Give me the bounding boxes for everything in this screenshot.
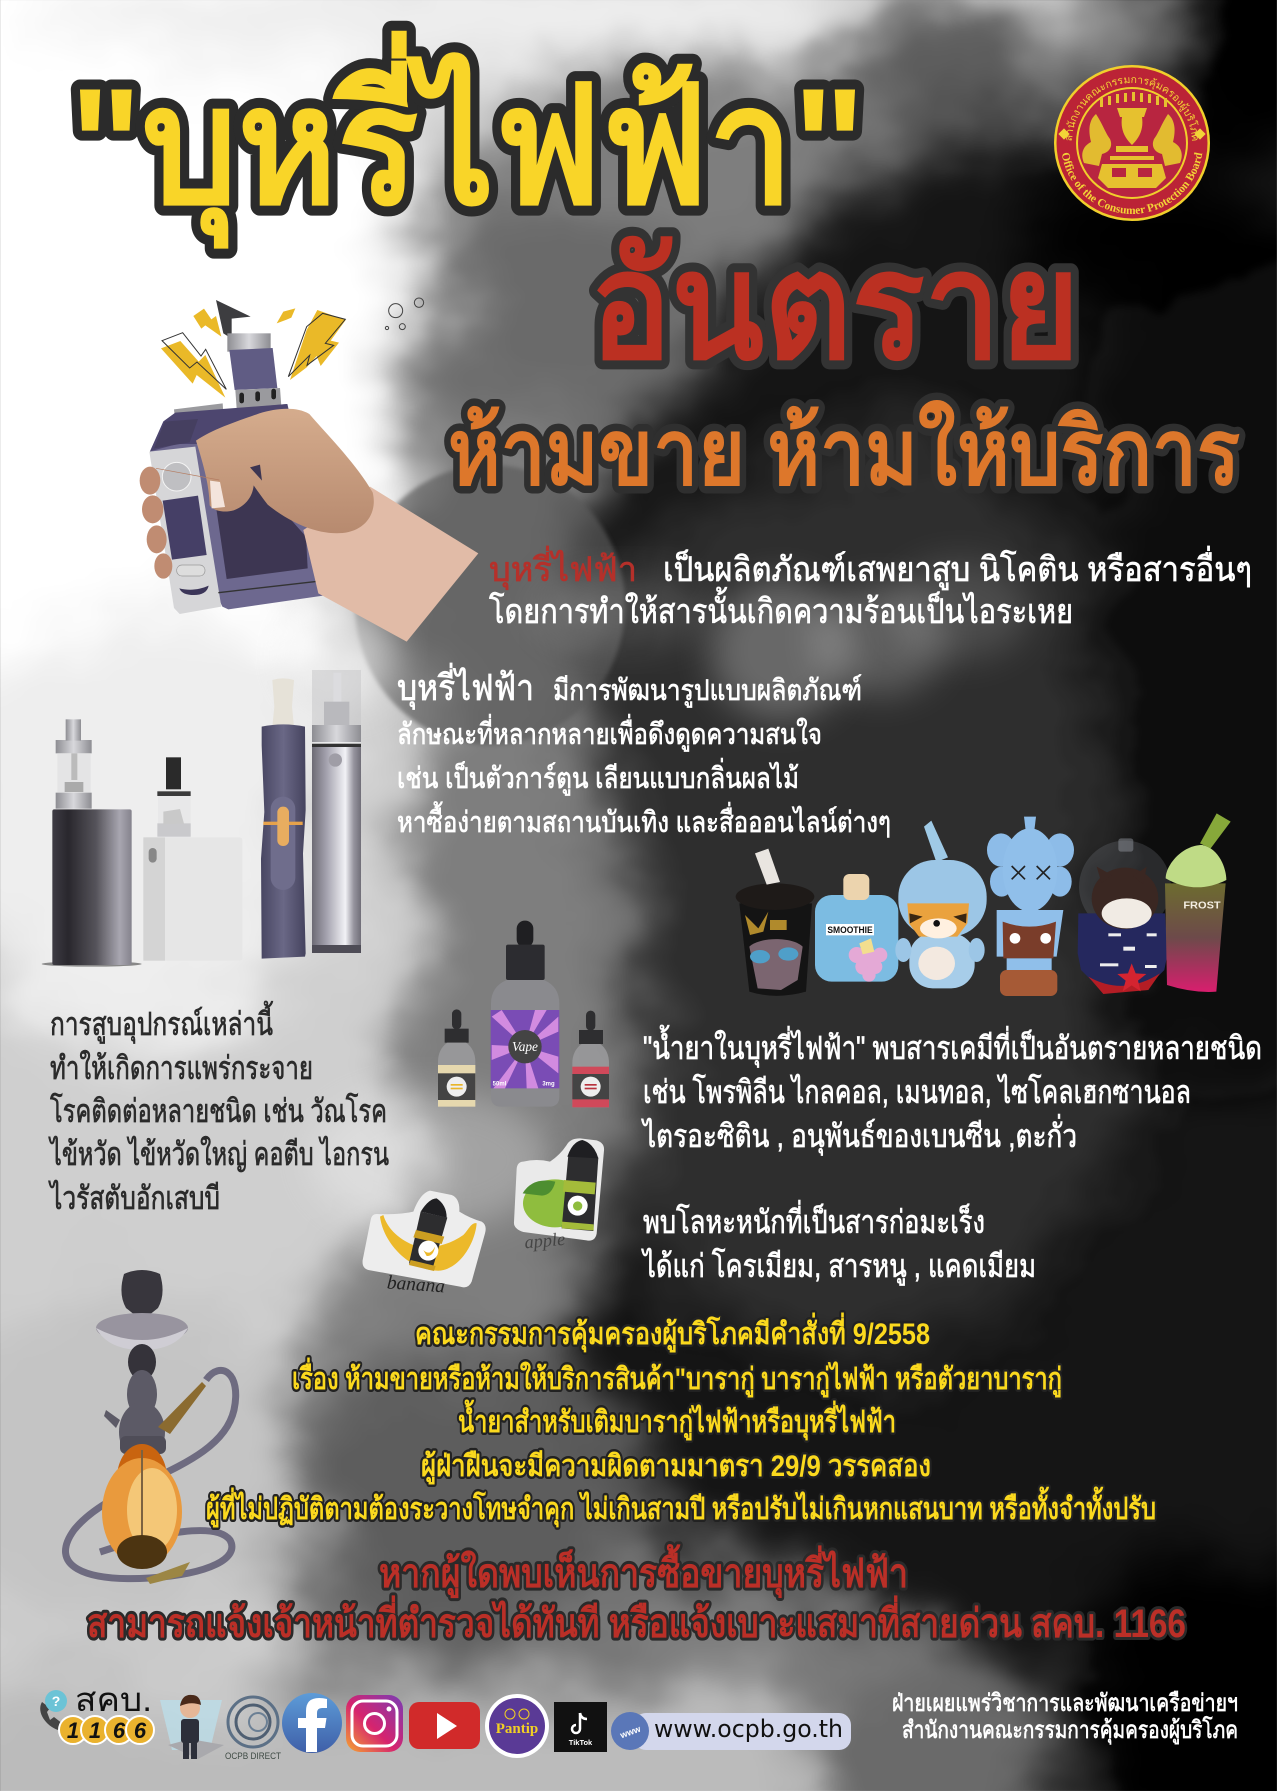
text: legal order — [206, 1312, 1156, 1528]
logo: OCPB direct: OCPB DIRECT — [225, 1751, 281, 1761]
fingers — [140, 467, 172, 579]
atomizer — [174, 300, 281, 417]
consumer protection board seal: สำนักงานคณะกรรมการคุ้มครองผู้บริโภค — [1066, 77, 1199, 141]
bubbles — [385, 298, 424, 330]
text: harmful chemicals: ไตรอะซิติน , อนุพันธ์ของเบนซีน ,ตะกั่ว — [641, 1114, 1077, 1156]
blue figure toy — [987, 817, 1074, 996]
text: legal order: ผู้ฝ่าฝืนจะมีความผิดตามมาตรา 29/9 วรรคสอง — [421, 1450, 931, 1485]
text: department credit — [892, 1690, 1238, 1745]
logo: OCPB hotline 1166: 6 — [113, 1718, 126, 1743]
icon: Facebook — [282, 1693, 342, 1753]
smoothie bottle: SMOOTHIE — [827, 925, 873, 935]
dog in dome toy — [1078, 838, 1171, 994]
icon: e-liquid bottles — [363, 921, 609, 1297]
banana sticker: banana — [386, 1272, 446, 1297]
icon: YouTube — [409, 1702, 480, 1749]
text: product variety: เช่น เป็นตัวการ์ตูน เลียนแบบกลิ่นผลไม้ — [397, 758, 799, 796]
website badge: www.ocpb.go.th — [654, 1715, 843, 1743]
text: product variety: หาซื้อง่ายตามสถานบันเทิง และสื่อออนไลน์ต่างๆ — [397, 801, 891, 839]
icon: toy-shaped vapes — [736, 813, 1231, 996]
small red bottle — [572, 1011, 609, 1107]
icon: Pantip: Pantip — [496, 1721, 538, 1737]
large bottle — [491, 921, 559, 1107]
text: disease risk: ทำให้เกิดการแพร่กระจาย — [50, 1050, 313, 1086]
tiger toy — [895, 821, 987, 988]
consumer protection board seal: Office of the Consumer Protection Board — [1062, 152, 1202, 214]
text: disease risk: ไวรัสตับอักเสบบี — [48, 1180, 220, 1216]
silver pen vape — [312, 670, 361, 953]
icon: Instagram — [346, 1695, 403, 1752]
icon: vape devices row — [42, 670, 361, 967]
text: disease risk: การสูบอุปกรณ์เหล่านี้ — [50, 1001, 274, 1044]
icon: cartoon officer — [160, 1695, 224, 1759]
smoke puffs near centre — [285, 465, 1030, 1230]
title: danger: อันตราย — [590, 222, 1080, 390]
icon: hookah — [66, 1270, 236, 1584]
text: legal order: เรื่อง ห้ามขายหรือห้ามให้บริการสินค้า"บารากู่ บารากู่ไฟฟ้า หรือตัวยาบารากู่ — [292, 1357, 1062, 1398]
logo: OCPB hotline 1166: ? — [52, 1693, 60, 1709]
text: definition of e-cigarette: โดยการทำให้สารนั้นเกิดความร้อนเป็นไอระเหย — [489, 587, 1073, 631]
large bottle: Vape — [512, 1039, 538, 1054]
logo: OCPB direct — [225, 1697, 281, 1761]
text: report call to action — [87, 1544, 1186, 1646]
smoothie bottle — [815, 874, 898, 982]
text: definition of e-cigarette: บุหรี่ไฟฟ้า — [489, 546, 637, 590]
website badge — [611, 1712, 851, 1750]
purple heat stick device — [261, 678, 306, 959]
apple sticker — [514, 1138, 604, 1252]
logo: OCPB hotline 1166: 1 — [67, 1718, 79, 1743]
logo: OCPB hotline 1166: 6 — [134, 1718, 147, 1743]
banana sticker — [363, 1191, 486, 1297]
icon: TikTok — [554, 1702, 607, 1752]
logo: OCPB hotline 1166: 1 — [89, 1718, 101, 1743]
text: report call to action: หากผู้ใดพบเห็นการซื้อขายบุหรี่ไฟฟ้า — [379, 1544, 908, 1599]
text: harmful chemicals: ได้แก่ โครเมียม, สารหนู , แคดเมียม — [641, 1248, 1036, 1286]
text: legal order: น้ำยาสำหรับเติมบารากู่ไฟฟ้าหรือบุหรี่ไฟฟ้า — [458, 1399, 896, 1441]
icon: Pantip — [485, 1694, 549, 1758]
website badge: www — [618, 1723, 643, 1741]
frost cup — [1165, 813, 1231, 992]
text: disease risk — [48, 1001, 389, 1216]
large bottle: 50ml — [493, 1082, 507, 1088]
frost cup: FROST — [1183, 900, 1221, 911]
text: legal order: คณะกรรมการคุ้มครองผู้บริโภคมีคำสั่งที่ 9/2558 — [415, 1312, 930, 1353]
text: disease risk: ไข้หวัด ไข้หวัดใหญ่ คอตีบ ไอกรน — [48, 1136, 389, 1172]
box mod — [149, 404, 325, 614]
text: disease risk: โรคติดต่อหลายชนิด เช่น วัณโรค — [50, 1093, 387, 1129]
large bottle: 3mg — [542, 1082, 555, 1088]
text: definition of e-cigarette — [489, 546, 1252, 631]
text: harmful chemicals: พบโลหะหนักที่เป็นสารก่อมะเร็ง — [643, 1200, 985, 1240]
skull cup — [736, 849, 814, 996]
consumer protection board seal — [1054, 65, 1210, 221]
small cream bottle — [438, 1009, 475, 1107]
icon: TikTok: TikTok — [569, 1738, 593, 1747]
text: product variety: มีการพัฒนารูปแบบผลิตภัณฑ์ — [553, 674, 862, 708]
title: electronic cigarette: "บุหรี่ไฟฟ้า" — [70, 30, 865, 249]
logo: OCPB hotline 1166 — [40, 1681, 154, 1744]
lightning bolts — [161, 308, 346, 398]
white box mod — [143, 757, 242, 961]
text: product variety — [397, 663, 891, 839]
fist — [196, 409, 374, 533]
black box mod — [42, 719, 142, 967]
text: product variety: บุหรี่ไฟฟ้า — [397, 663, 534, 710]
apple sticker: apple — [524, 1229, 566, 1252]
text: product variety: ลักษณะที่หลากหลายเพื่อดึงดูดความสนใจ — [397, 714, 822, 752]
logo: OCPB hotline 1166: สคบ. — [75, 1681, 152, 1718]
text: harmful chemicals — [641, 1025, 1262, 1286]
arm — [303, 487, 478, 642]
icon: hand holding vape device — [140, 298, 478, 642]
